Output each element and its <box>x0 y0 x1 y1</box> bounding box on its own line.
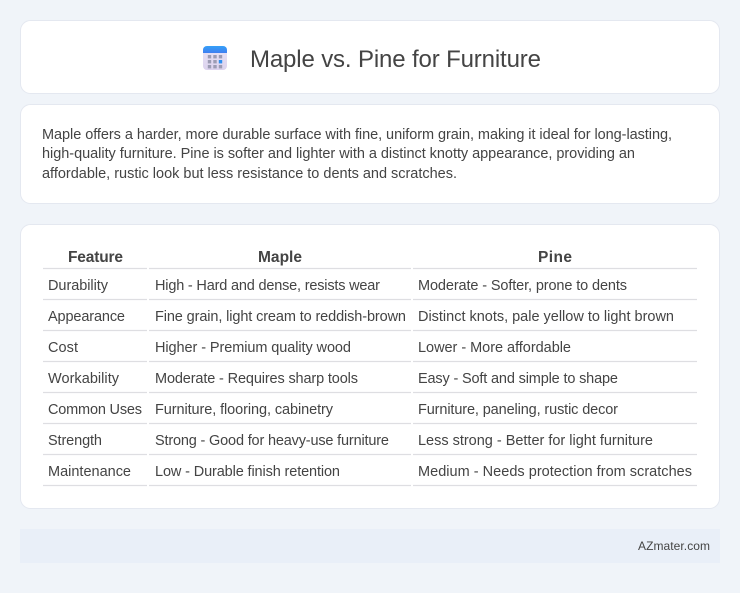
panel: intro description <box>20 104 720 204</box>
row: Cost: Higher - Premium quality wood <box>155 340 351 356</box>
row: Appearance: Fine grain, light cream to reddish-brown <box>155 309 406 325</box>
row: Workability: Moderate - Requires sharp tools <box>155 371 358 387</box>
row: Workability: Workability <box>48 371 120 387</box>
row: Common Uses: Furniture, paneling, rustic decor <box>418 402 618 418</box>
row: Cost: Cost <box>48 340 78 356</box>
row: Strength: Less strong - Better for light furniture <box>418 433 653 449</box>
row: Appearance: Appearance <box>48 309 125 325</box>
table header: Pine <box>538 249 572 266</box>
panel: comparison table <box>20 224 720 508</box>
row: Maintenance: Medium - Needs protection from scratches <box>418 464 692 480</box>
footer source text: AZmater.com <box>638 539 710 553</box>
row: Strength <box>48 433 653 449</box>
table header: Maple <box>258 249 302 266</box>
row: Cost: Lower - More affordable <box>418 340 571 356</box>
text block: intro: affordable, rustic look but less resistance to dents and scratches. <box>42 166 457 182</box>
text block: intro: Maple offers a harder, more durable surface with fine, uniform grain, making it ideal for long-lasting, <box>42 127 672 143</box>
footer band <box>20 529 720 563</box>
row: Common Uses: Furniture, flooring, cabinetry <box>155 402 334 418</box>
row: Common Uses <box>48 402 618 418</box>
title: Maple vs. Pine for Furniture <box>250 46 541 73</box>
panel: title card <box>20 20 720 94</box>
row: Cost <box>48 340 571 356</box>
row: Strength: Strong - Good for heavy-use furniture <box>155 433 389 449</box>
row: Maintenance: Maintenance <box>48 464 131 480</box>
row: Durability <box>48 278 627 294</box>
row: Maintenance: Low - Durable finish retention <box>155 464 340 480</box>
row: Workability: Easy - Soft and simple to shape <box>418 371 618 387</box>
row: Durability: High - Hard and dense, resists wear <box>155 278 380 294</box>
row: Appearance: Distinct knots, pale yellow to light brown <box>418 309 674 325</box>
text block: intro: high-quality furniture. Pine is softer and lighter with a distinct knotty appearance, providing an <box>42 146 635 162</box>
text block: intro <box>42 127 672 182</box>
table header <box>68 249 572 266</box>
table header: Feature <box>68 249 123 266</box>
row: Strength: Strength <box>48 433 102 449</box>
row: Workability <box>48 371 618 387</box>
row: Common Uses: Common Uses <box>48 402 142 418</box>
icon: calendar <box>203 46 227 70</box>
row: Durability: Moderate - Softer, prone to dents <box>418 278 627 294</box>
row: Appearance <box>48 309 674 325</box>
row: Maintenance <box>48 464 692 480</box>
row: Durability: Durability <box>48 278 109 294</box>
